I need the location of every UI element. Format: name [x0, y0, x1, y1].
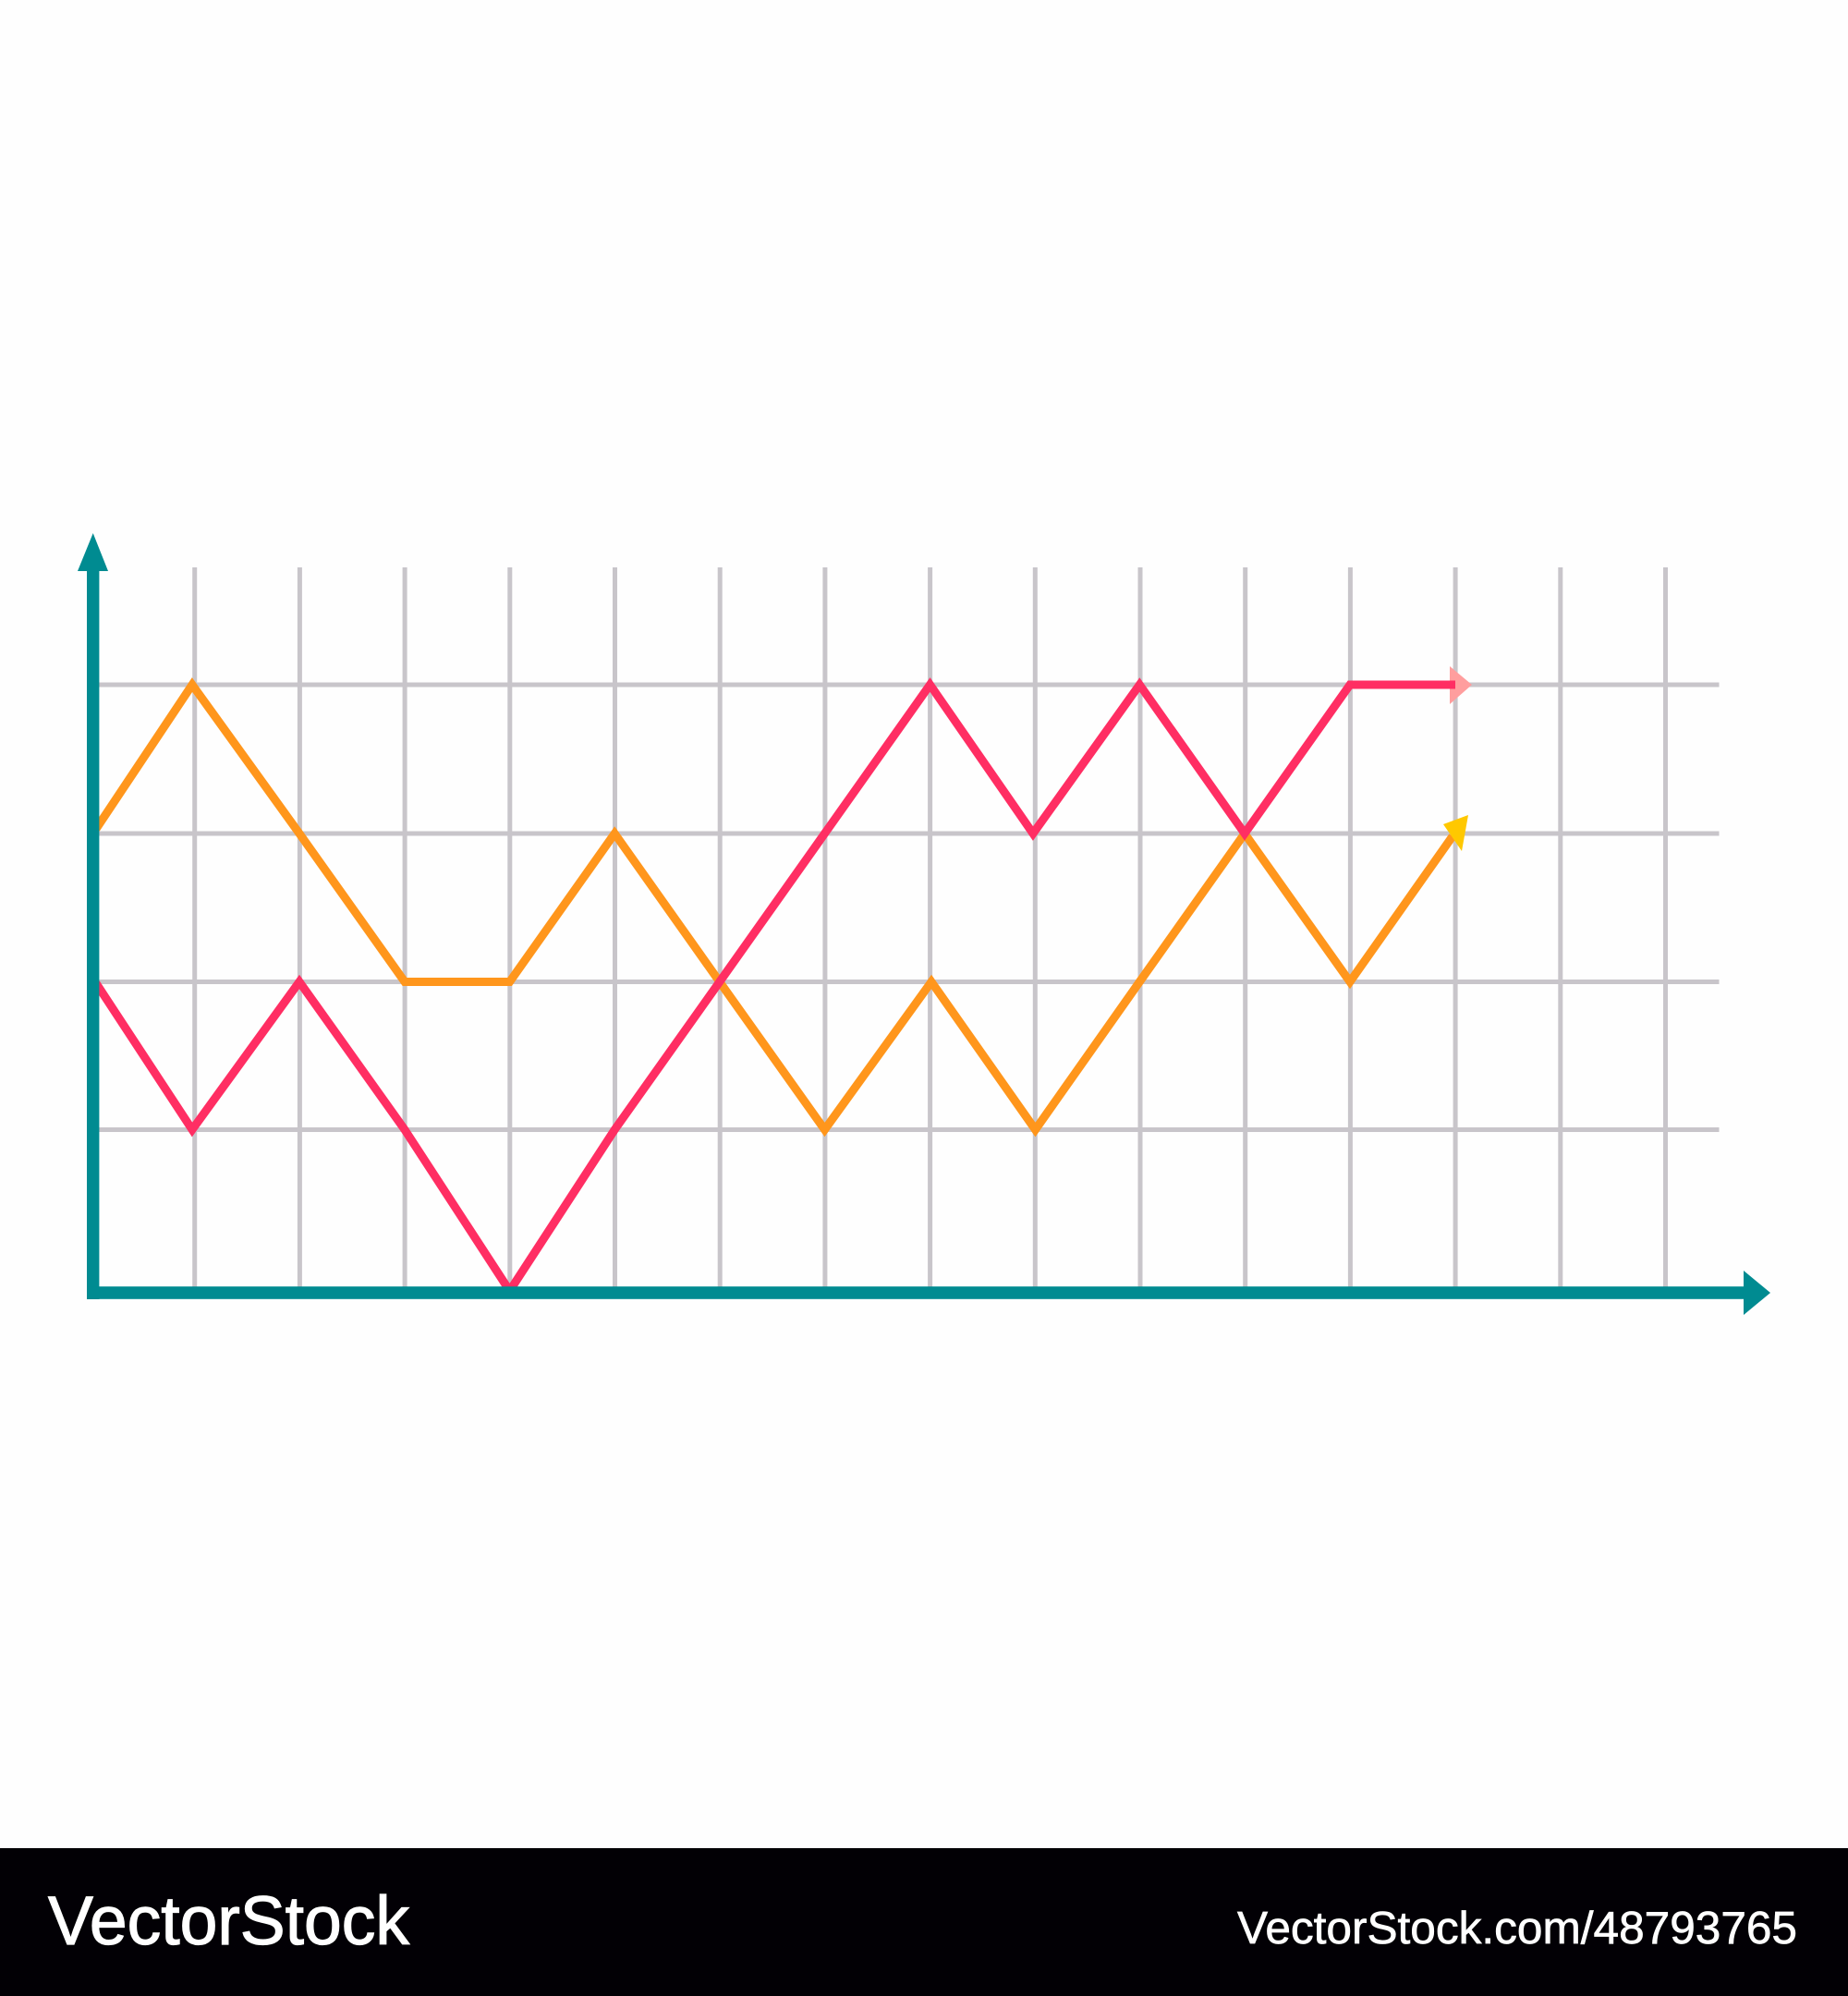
pink segment ending over its arrowhead: [1350, 680, 1455, 689]
orange data line: [96, 685, 1453, 1129]
icon: light pink arrowhead on pink line: [1450, 666, 1472, 704]
pink data line: [96, 685, 1455, 1291]
y axis with arrow: [78, 533, 108, 1299]
icon: yellow arrowhead on orange line: [1443, 815, 1468, 851]
footer image reference: VectorStock.com/48793765: [1237, 1904, 1797, 1953]
footer bar: [0, 1848, 1848, 1996]
x axis with arrow: [87, 1271, 1770, 1315]
footer brand name: VectorStock: [48, 1882, 410, 1959]
